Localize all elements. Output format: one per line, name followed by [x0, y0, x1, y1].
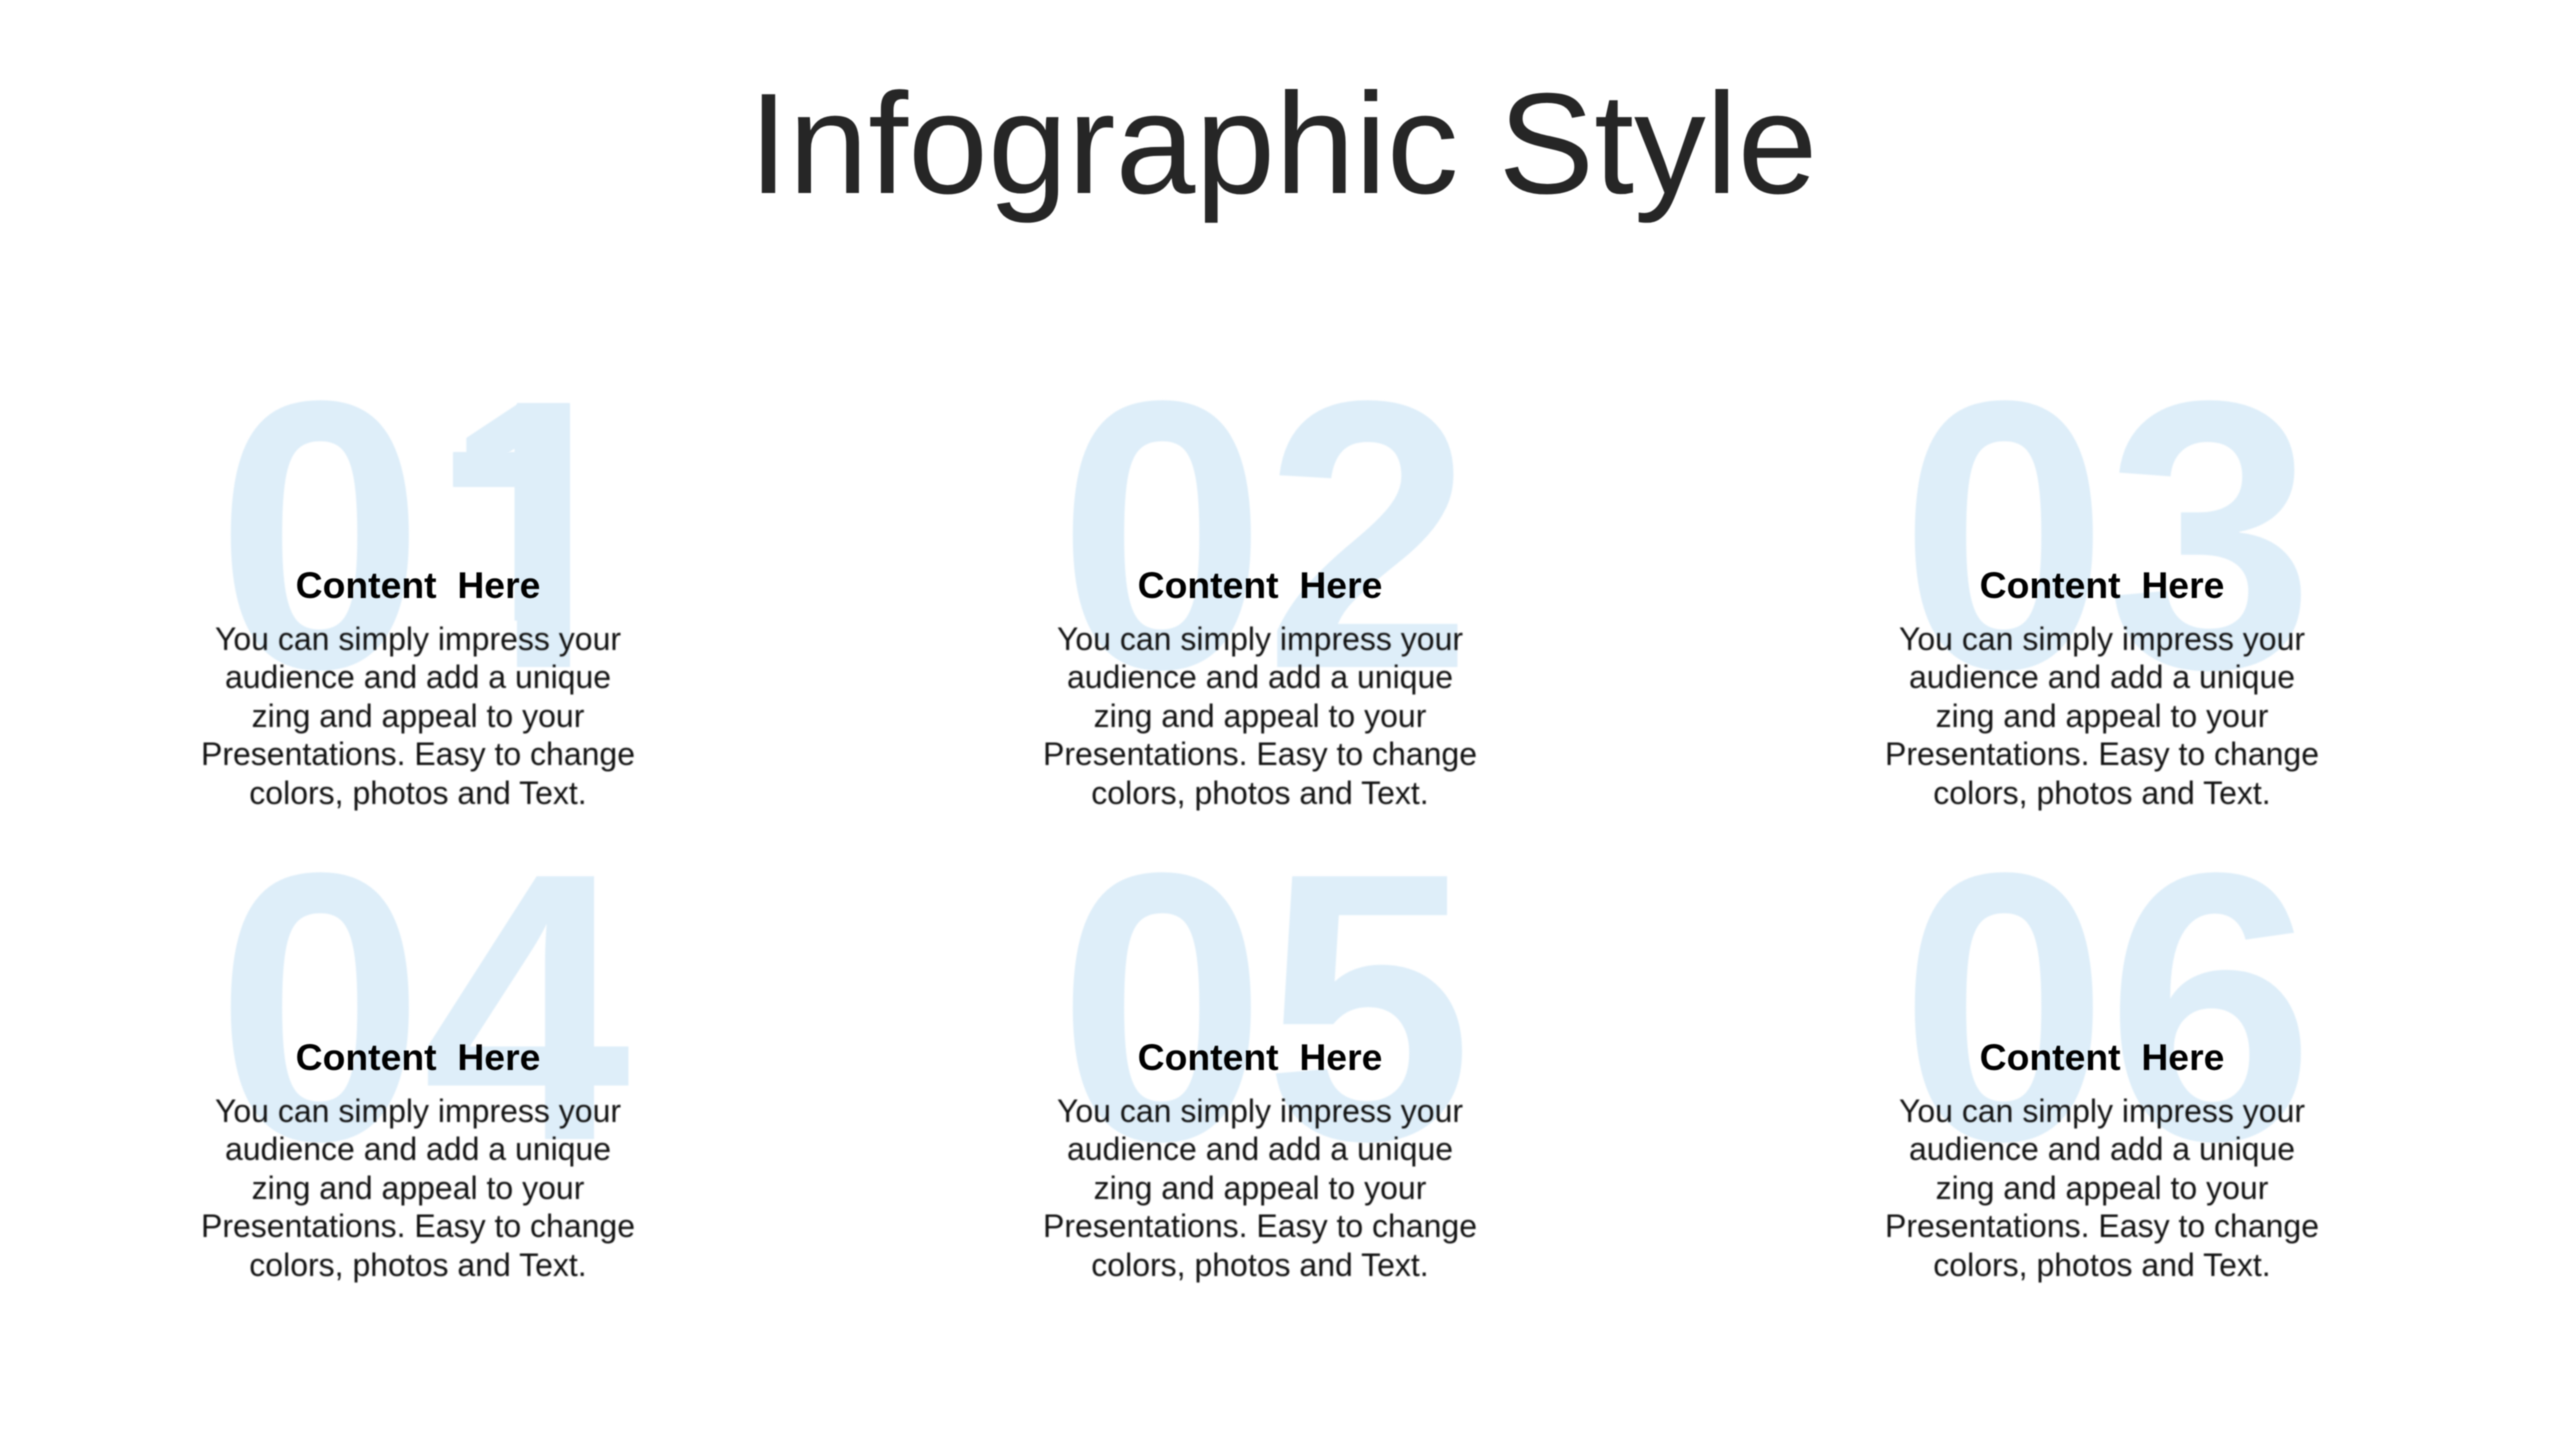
text block 01: zing and appeal to your [252, 698, 584, 734]
number 05: 05 [1058, 793, 1470, 1220]
text block 04: You can simply impress your [215, 1093, 621, 1129]
text block 05: colors, photos and Text. [1091, 1247, 1429, 1283]
text block 04: zing and appeal to your [252, 1170, 584, 1206]
panel: item 06 [1885, 793, 2319, 1284]
text block 02 [1043, 621, 1477, 812]
text block 05: zing and appeal to your [1094, 1170, 1426, 1206]
text block 02: colors, photos and Text. [1091, 775, 1429, 811]
text block 06: Presentations. Easy to change [1885, 1208, 2319, 1244]
title: Infographic Style [749, 64, 1817, 224]
text block 01: audience and add a unique [225, 659, 611, 695]
number 01: 1 [427, 321, 633, 748]
panel: item 01 [201, 321, 635, 812]
heading 05: Content Here [1138, 1036, 1382, 1078]
text block 06 [1885, 1093, 2319, 1284]
panel: item 03 [1885, 321, 2319, 812]
number 03: 03 [1900, 321, 2312, 748]
number 06: 06 [1900, 793, 2312, 1220]
heading 02: Content Here [1138, 564, 1382, 606]
heading 06: Content Here [1980, 1036, 2224, 1078]
text block 03: Presentations. Easy to change [1885, 736, 2319, 772]
panel: item 02 [1043, 321, 1477, 812]
heading 04: Content Here [296, 1036, 540, 1078]
text block 06: You can simply impress your [1899, 1093, 2305, 1129]
text block 04: audience and add a unique [225, 1131, 611, 1167]
text block 06: audience and add a unique [1909, 1131, 2295, 1167]
text block 04: colors, photos and Text. [249, 1247, 587, 1283]
text block 02: Presentations. Easy to change [1043, 736, 1477, 772]
text block 04 [201, 1093, 635, 1284]
text block 06: colors, photos and Text. [1933, 1247, 2271, 1283]
number 04: 04 [216, 793, 628, 1220]
text block 03 [1885, 621, 2319, 812]
number 01 [216, 321, 570, 748]
text block 04: Presentations. Easy to change [201, 1208, 635, 1244]
text block 03: zing and appeal to your [1936, 698, 2268, 734]
text block 05 [1043, 1093, 1477, 1284]
heading 01: Content Here [296, 564, 540, 606]
panel: item 05 [1043, 793, 1477, 1284]
heading 03: Content Here [1980, 564, 2224, 606]
text block 01: You can simply impress your [215, 621, 621, 657]
text block 03: audience and add a unique [1909, 659, 2295, 695]
text block 02: zing and appeal to your [1094, 698, 1426, 734]
text block 03: colors, photos and Text. [1933, 775, 2271, 811]
text block 01: colors, photos and Text. [249, 775, 587, 811]
text block 05: Presentations. Easy to change [1043, 1208, 1477, 1244]
text block 02: You can simply impress your [1057, 621, 1463, 657]
text block 05: audience and add a unique [1067, 1131, 1453, 1167]
text block 01 [201, 621, 635, 812]
number 01: 0 [216, 321, 422, 748]
number 02: 02 [1058, 321, 1470, 748]
panel: item 04 [201, 793, 635, 1284]
text block 06: zing and appeal to your [1936, 1170, 2268, 1206]
text block 01: Presentations. Easy to change [201, 736, 635, 772]
text block 02: audience and add a unique [1067, 659, 1453, 695]
text block 03: You can simply impress your [1899, 621, 2305, 657]
text block 05: You can simply impress your [1057, 1093, 1463, 1129]
